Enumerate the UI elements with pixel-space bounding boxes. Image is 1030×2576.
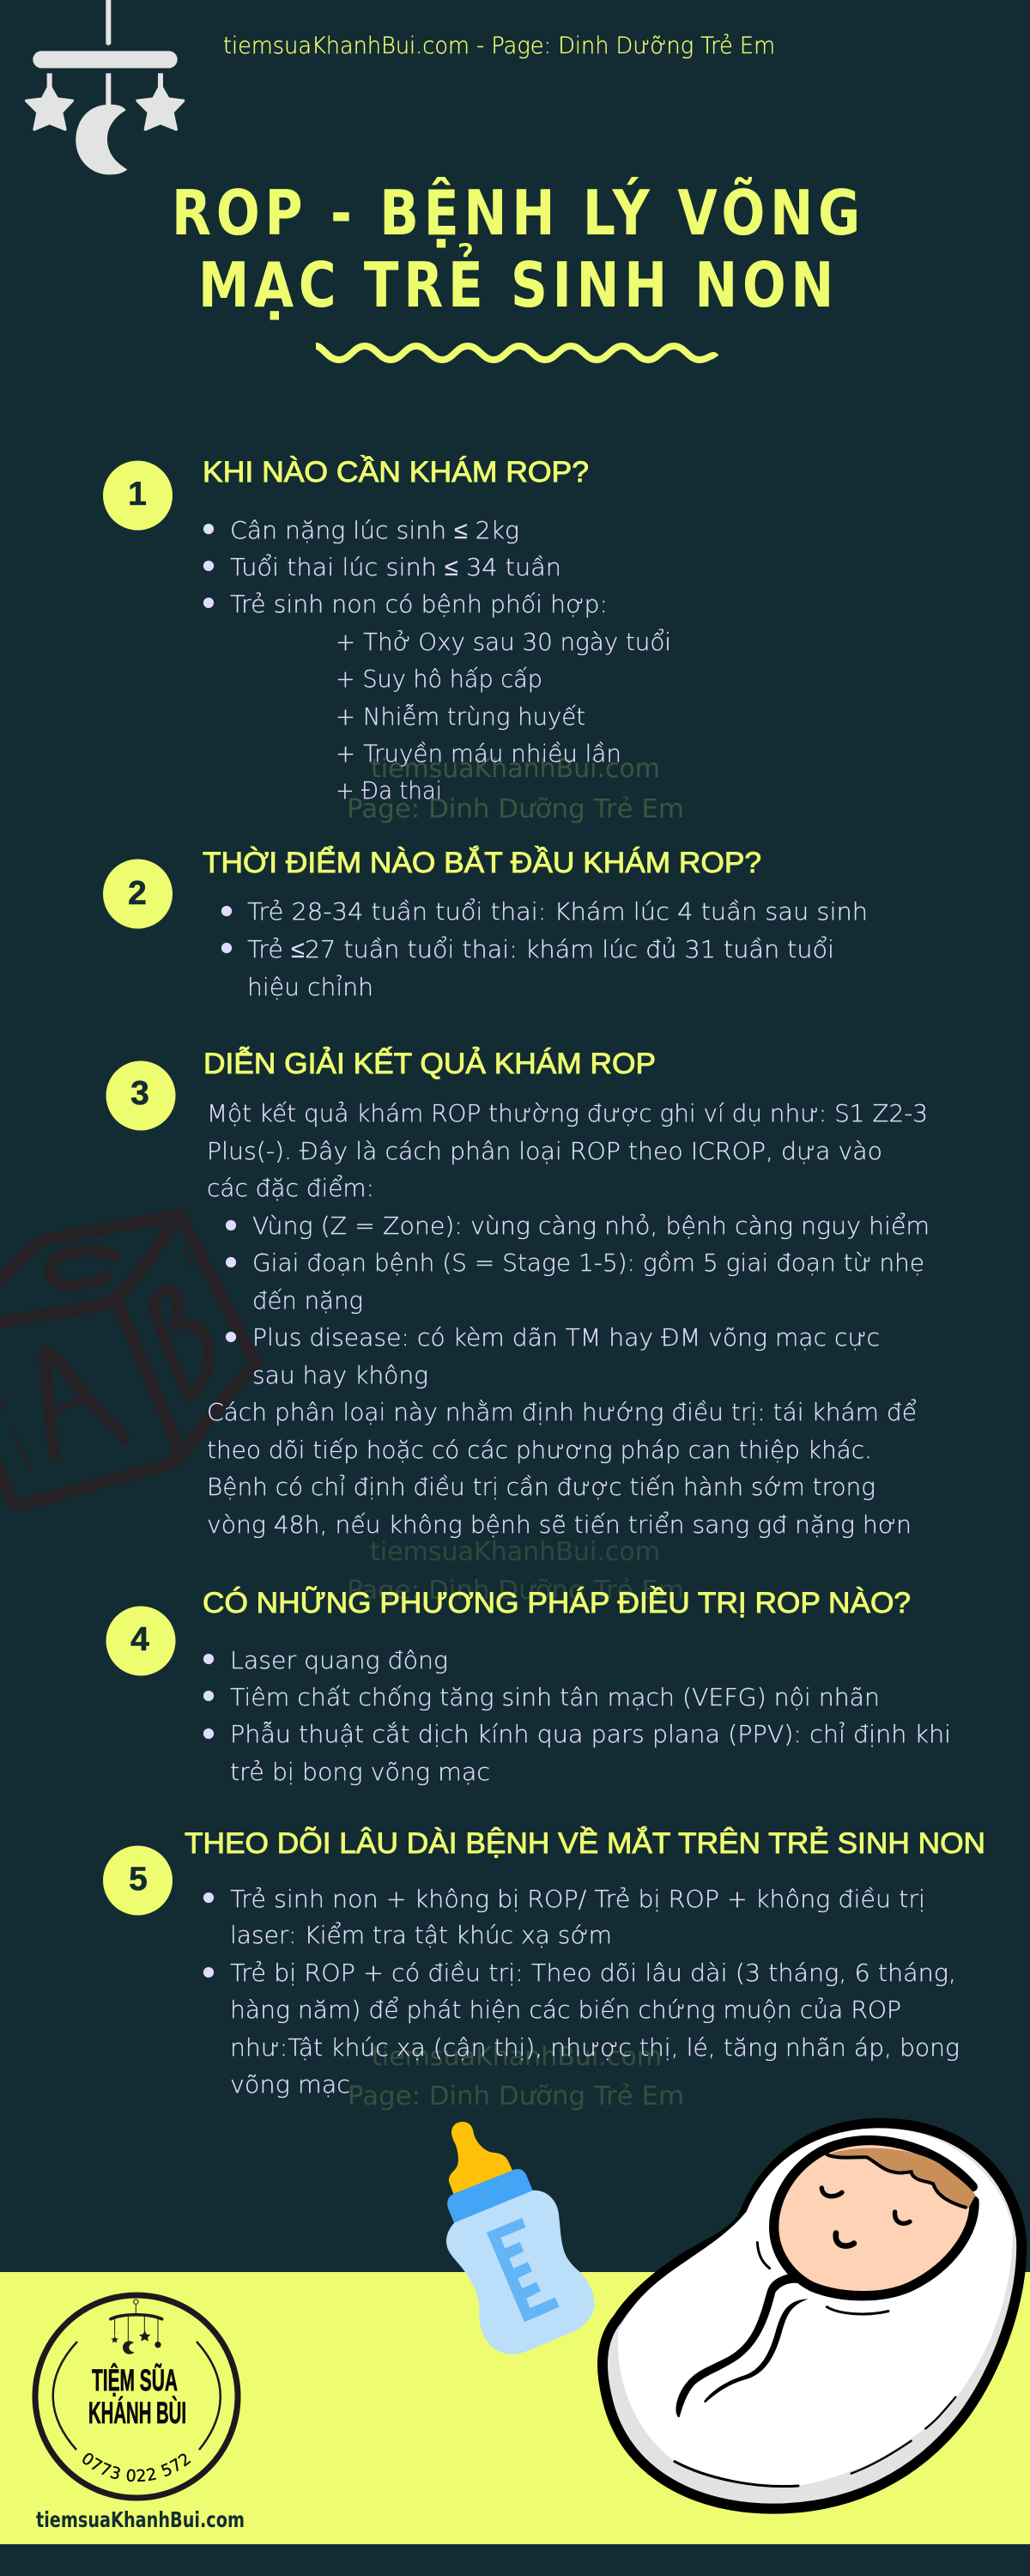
body 3: Một kết quả khám ROP thường được ghi ví dụ như: S1 Z2-3	[207, 1099, 928, 1127]
number badge 3: 3	[130, 1075, 149, 1112]
body 3: Bệnh có chỉ định điều trị cần được tiến hành sớm trong	[207, 1473, 876, 1501]
body 3: vòng 48h, nếu không bệnh sẽ tiến triển sang gđ nặng hơn	[207, 1510, 912, 1539]
icon: baby mobile	[27, 0, 184, 174]
list 1: + Truyền máu nhiều lần	[336, 739, 621, 768]
list 4: Phẫu thuật cắt dịch kính qua pars plana (PPV): chỉ định khi	[230, 1720, 951, 1748]
list 5: võng mạc	[230, 2070, 350, 2099]
watermark: second: tiemsuaKhanhBui.com	[370, 1537, 660, 1567]
list 1: + Thở Oxy sau 30 ngày tuổi	[336, 628, 671, 656]
heading 4: CÓ NHỮNG PHƯƠNG PHÁP ĐIỀU TRỊ ROP NÀO?	[203, 1587, 911, 1619]
list 5: hàng năm) để phát hiện các biến chứng muộn của ROP	[230, 1996, 901, 2024]
source line: tiemsuaKhanhBui.com - Page: Dinh Dưỡng Trẻ Em	[223, 33, 775, 59]
logo name: KHÁNH BÙI	[88, 2396, 186, 2430]
number badge 5: 5	[129, 1861, 148, 1898]
panel: section 4	[106, 1587, 951, 1786]
watermark: second	[347, 1537, 684, 1606]
list 5: laser: Kiểm tra tật khúc xạ sớm	[230, 1921, 612, 1949]
panel: section 5	[103, 1827, 985, 2099]
watermark: first: Page: Dinh Dưỡng Trẻ Em	[347, 794, 684, 824]
list 5: như:Tật khúc xạ (cận thị), nhược thị, lé, tăng nhãn áp, bong	[230, 2033, 960, 2062]
body 3: Cách phân loại này nhằm định hướng điều trị: tái khám để	[207, 1398, 917, 1426]
number badge 2: 2	[128, 875, 147, 912]
list 2: Trẻ ≤27 tuần tuổi thai: khám lúc đủ 31 tuần tuổi	[247, 935, 834, 963]
number badge 4: 4	[130, 1621, 149, 1658]
list 1: + Nhiễm trùng huyết	[336, 702, 585, 731]
logo mobile icon	[111, 2300, 162, 2354]
icon: swaddled baby	[603, 2123, 1021, 2509]
list 4: trẻ bị bong võng mạc	[230, 1758, 490, 1786]
list 1	[203, 516, 671, 805]
list 1: + Suy hô hấp cấp	[336, 665, 542, 693]
watermark: third	[348, 2042, 684, 2111]
title: MẠC TRẺ SINH NON	[198, 244, 839, 321]
footer url: tiemsuaKhanhBui.com	[36, 2507, 245, 2532]
list 5: Trẻ sinh non + không bị ROP/ Trẻ bị ROP + không điều trị	[230, 1885, 925, 1913]
heading 5: THEO DÕI LÂU DÀI BỆNH VỀ MẮT TRÊN TRẺ SINH NON	[185, 1827, 985, 1860]
footer band	[0, 2272, 1030, 2544]
list 4: Tiêm chất chống tăng sinh tân mạch (VEFG) nội nhãn	[230, 1683, 880, 1711]
watermark: second: Page: Dinh Dưỡng Trẻ Em	[347, 1576, 684, 1606]
list 1: Trẻ sinh non có bệnh phối hợp:	[230, 590, 608, 618]
icon: alphabet block	[0, 1215, 256, 1506]
list 5: Trẻ bị ROP + có điều trị: Theo dõi lâu dài (3 tháng, 6 tháng,	[230, 1959, 956, 1987]
panel: section 2	[103, 847, 868, 1001]
body 3: Giai đoạn bệnh (S = Stage 1-5): gồm 5 giai đoạn từ nhẹ	[252, 1249, 924, 1277]
logo badge	[33, 2293, 240, 2500]
heading 1: KHI NÀO CẦN KHÁM ROP?	[203, 456, 589, 489]
body 3: đến nặng	[252, 1286, 363, 1315]
list 1: Tuổi thai lúc sinh ≤ 34 tuần	[230, 553, 561, 581]
title	[172, 177, 865, 321]
wavy underline	[316, 346, 716, 360]
heading 2: THỜI ĐIỂM NÀO BẮT ĐẦU KHÁM ROP?	[203, 847, 761, 879]
list 2: hiệu chỉnh	[247, 973, 373, 1001]
list 1: + Đa thai	[336, 776, 442, 805]
body 3: theo dõi tiếp hoặc có các phương pháp can thiệp khác.	[207, 1436, 872, 1464]
logo name	[88, 2363, 186, 2430]
list 4: Laser quang đông	[230, 1646, 448, 1674]
body 3: các đặc điểm:	[207, 1174, 374, 1202]
list 5	[203, 1885, 960, 2099]
list 2: Trẻ 28-34 tuần tuổi thai: Khám lúc 4 tuần sau sinh	[247, 897, 868, 926]
number badge 2	[103, 859, 173, 929]
list 4	[203, 1646, 951, 1786]
list 2	[221, 897, 868, 1001]
logo phone: 0773 022 572	[82, 2452, 191, 2482]
body 3	[207, 1099, 930, 1539]
body 3: sau hay không	[252, 1361, 428, 1389]
watermark: first: tiemsuaKhanhBui.com	[371, 754, 660, 784]
list 1: Cân nặng lúc sinh ≤ 2kg	[230, 516, 519, 544]
panel: section 1	[103, 456, 671, 805]
watermark: third: Page: Dinh Dưỡng Trẻ Em	[348, 2081, 684, 2111]
number badge 1	[103, 460, 173, 531]
body 3: Plus disease: có kèm dãn TM hay ĐM võng mạc cực	[252, 1323, 880, 1352]
logo name: TIỆM SŨA	[92, 2363, 178, 2397]
watermark: first	[347, 754, 684, 824]
number badge 4	[106, 1606, 175, 1676]
icon: baby bottle	[446, 2122, 595, 2354]
number badge 5	[103, 1846, 173, 1915]
panel: section 3	[106, 1048, 930, 1539]
title: ROP - BỆNH LÝ VÕNG	[172, 177, 865, 249]
number badge 1: 1	[128, 476, 147, 513]
heading 3: DIỄN GIẢI KẾT QUẢ KHÁM ROP	[203, 1048, 656, 1080]
body 3: Vùng (Z = Zone): vùng càng nhỏ, bệnh càng nguy hiểm	[252, 1212, 930, 1240]
number badge 3	[106, 1061, 175, 1130]
body 3: Plus(-). Đây là cách phân loại ROP theo ICROP, dựa vào	[207, 1137, 882, 1165]
watermark: third: tiemsuaKhanhBui.com	[372, 2042, 662, 2072]
